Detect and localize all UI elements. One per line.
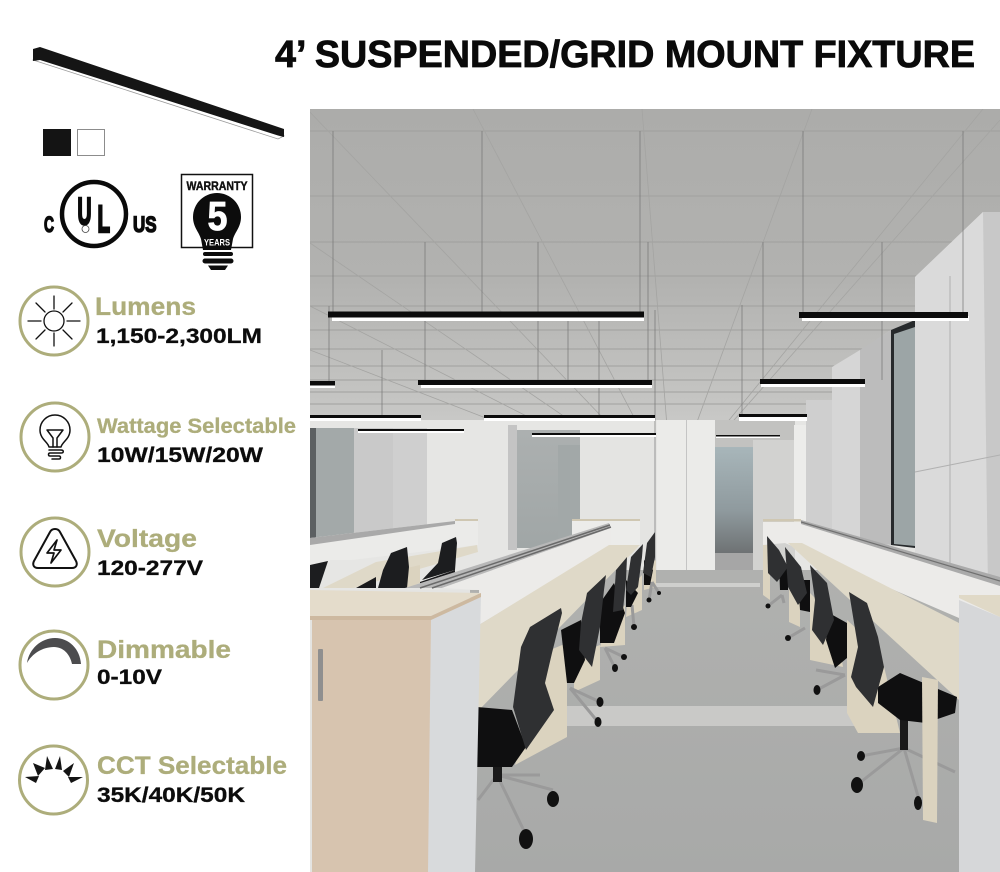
spec: dimmable: Dimmable <box>97 636 231 664</box>
chair seats <box>477 560 957 767</box>
office interior photo <box>307 109 1000 872</box>
floor <box>470 570 965 872</box>
office chairs <box>477 532 957 849</box>
icon: cULus certification: U <box>78 191 92 233</box>
icon: 5-year warranty bulb: YEARS <box>204 238 230 248</box>
spec: dimmable: 0-10V <box>97 666 162 689</box>
front right cabinet <box>959 595 1000 872</box>
spec: voltage: Voltage <box>97 525 197 553</box>
icon: sun <box>28 296 80 346</box>
spec: wattage selectable: Wattage Selectable <box>97 414 296 438</box>
spec: CCT selectable <box>20 746 287 814</box>
icon: light bulb <box>40 415 70 459</box>
icon: dimming arc <box>27 638 81 664</box>
spec: wattage selectable <box>21 403 296 471</box>
icon: half sun spikes <box>25 756 83 783</box>
chair mesh backs <box>513 532 884 750</box>
desk leg <box>922 677 938 823</box>
finish colour swatches <box>43 129 104 156</box>
icon: cULus certification <box>44 182 156 246</box>
icon: cULus certification: US <box>133 212 156 237</box>
spec: dimmable <box>20 631 231 699</box>
icon: cULus certification: L <box>98 199 110 241</box>
spec: wattage selectable: 10W/15W/20W <box>97 444 263 467</box>
left row of desks <box>405 519 656 765</box>
spec: CCT selectable: 35K/40K/50K <box>97 784 245 807</box>
product image: linear fixture <box>33 47 284 139</box>
icon: 5-year warranty bulb <box>182 174 252 270</box>
back left workstation <box>310 519 480 590</box>
far wall and windows <box>310 212 1000 595</box>
spec: CCT selectable: CCT Selectable <box>97 752 287 780</box>
icon: 5-year warranty bulb: 5 <box>208 193 228 239</box>
spec: voltage: 120-277V <box>97 557 203 580</box>
ceiling with grid <box>310 109 1000 420</box>
icon: cULus certification: C <box>44 212 54 237</box>
spec: voltage <box>21 518 203 586</box>
spec: lumens: 1,150-2,300LM <box>96 325 262 348</box>
front left cabinet <box>310 590 481 872</box>
title: 4’ SUSPENDED/GRID MOUNT FIXTURE <box>275 34 975 76</box>
suspended linear lights <box>310 131 969 570</box>
icon: 5-year warranty bulb: WARRANTY <box>186 181 248 193</box>
right row of desks <box>763 519 1000 733</box>
spec: lumens: Lumens <box>95 293 196 321</box>
icon: triangle with lightning bolt <box>33 529 77 568</box>
spec: lumens <box>20 287 262 355</box>
